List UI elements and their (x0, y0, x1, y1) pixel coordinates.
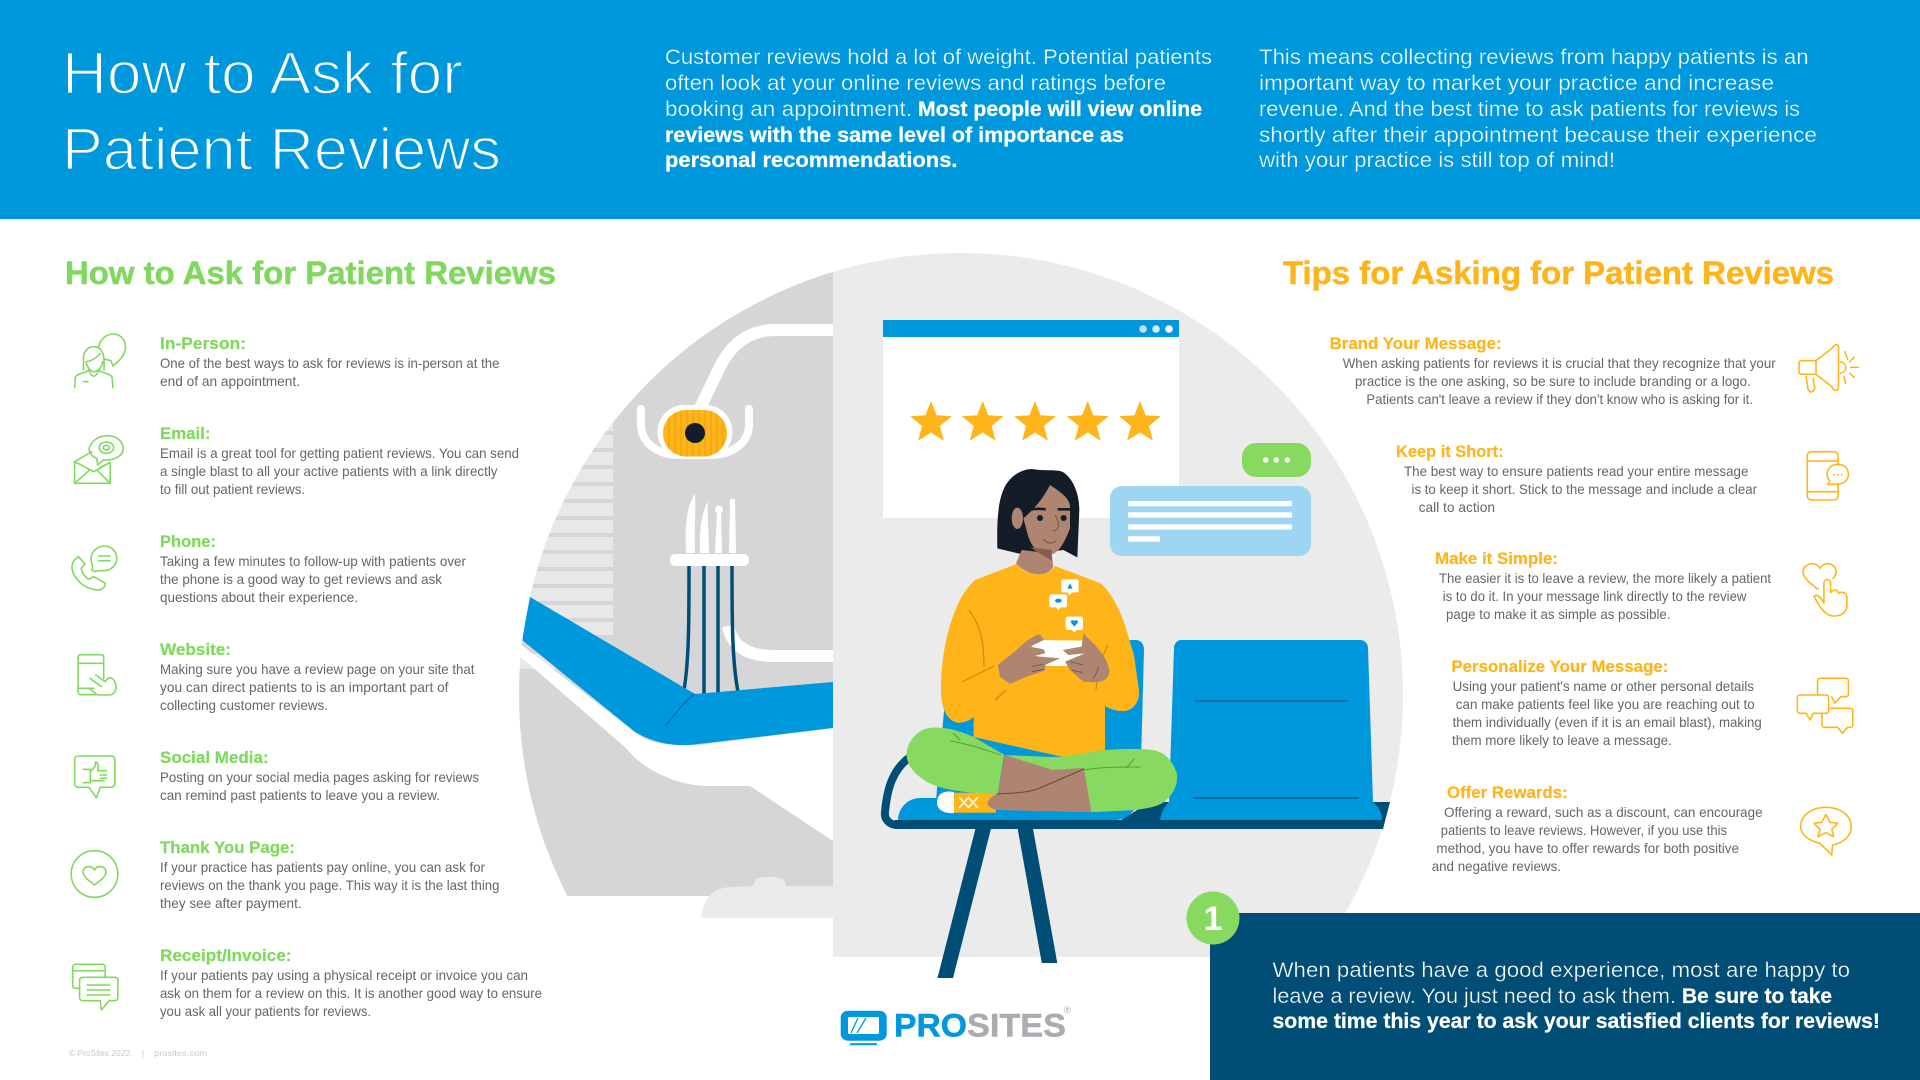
tip: keep it short: call to action (1419, 500, 1495, 515)
item: thank you page (160, 838, 499, 911)
panel: tips (1283, 255, 1858, 874)
item: website: you can direct patients to is an important part of (160, 680, 449, 695)
tip: make it simple: is to do it. In your message link directly to the review (1443, 589, 1747, 604)
item: receipt/invoice (160, 946, 542, 1019)
icon: phone message (1807, 452, 1848, 500)
sock and shoe (937, 792, 996, 813)
tip: offer rewards: and negative reviews. (1432, 859, 1561, 874)
section heading: Tips for Asking for Patient Reviews (1283, 255, 1834, 291)
dental chair blue cushion (522, 597, 833, 745)
intro text column 1: often look at your online reviews and ratings before (665, 72, 1166, 95)
callout: closing message (1210, 913, 1920, 1080)
logo: PRO (894, 1008, 967, 1044)
footer credit (69, 1049, 207, 1058)
logo icon (841, 1011, 887, 1045)
intro text column 1: Most people will view online (918, 98, 1202, 121)
item: receipt/invoice: Receipt/Invoice: (160, 946, 292, 965)
green typing bubble (1242, 443, 1311, 477)
tip: brand your message (1330, 334, 1776, 407)
tip: offer rewards: Offer Rewards: (1447, 783, 1568, 802)
item: website (160, 640, 475, 713)
title: Patient Reviews (62, 116, 501, 182)
icon: email (75, 436, 123, 483)
intro text column 1: reviews with the same level of importance as (665, 124, 1124, 147)
tip: personalize your message: can make patients feel like you are reaching out to (1456, 697, 1755, 712)
item: social media: can remind past patients to leave you a review. (160, 788, 440, 803)
intro text column 2 (1258, 46, 1817, 172)
item: in-person: end of an appointment. (160, 374, 300, 389)
item: phone: the phone is a good way to get reviews and ask (160, 572, 442, 587)
icon: megaphone (1799, 345, 1858, 392)
intro text column 1: Customer reviews hold a lot of weight. Potential patients (665, 46, 1212, 69)
item: thank you page: reviews on the thank you page. This way it is the last thing (160, 878, 499, 893)
review window (883, 320, 1179, 518)
item: thank you page: they see after payment. (160, 896, 302, 911)
left seat (936, 640, 1144, 800)
item: email: to fill out patient reviews. (160, 482, 305, 497)
tip: keep it short: is to keep it short. Stick to the message and include a clear (1412, 482, 1757, 497)
item: email: a single blast to all your active patients with a link directly (160, 464, 498, 479)
tip: brand your message: Brand Your Message: (1330, 334, 1502, 353)
item: phone: Taking a few minutes to follow-up with patients over (160, 554, 466, 569)
seated woman (906, 469, 1177, 813)
tip: offer rewards: method, you have to offer rewards for both positive (1436, 841, 1739, 856)
number badge: 1 (1204, 900, 1222, 938)
tip: personalize your message: Personalize Your Message: (1451, 657, 1668, 676)
tip: make it simple: Make it Simple: (1435, 549, 1558, 568)
tip: personalize your message (1451, 657, 1762, 748)
footer credit: © ProSites 2022 (69, 1049, 131, 1058)
crossed legs (906, 728, 1177, 812)
tip: offer rewards: Offering a reward, such as a discount, can encourage (1444, 805, 1763, 820)
icon: star bubble (1801, 807, 1851, 855)
waiting room bench (885, 640, 1390, 978)
tip: brand your message: Patients can't leave a review if they don't know who is asking for it. (1366, 392, 1753, 407)
panel: how to ask (65, 255, 556, 1058)
item: receipt/invoice: ask on them for a review on this. It is another good way to ensure (160, 986, 542, 1001)
tip: keep it short: Keep it Short: (1396, 442, 1504, 461)
tip: keep it short: The best way to ensure patients read your entire message (1404, 464, 1748, 479)
blue message card (1110, 486, 1311, 556)
dental office background (500, 240, 1433, 957)
icon: heart circle (71, 851, 118, 897)
tip: brand your message: practice is the one asking, so be sure to include branding or a logo. (1355, 374, 1751, 389)
icon: person speaking (75, 334, 126, 388)
item: thank you page: If your practice has patients pay online, you can ask for (160, 860, 485, 875)
logo: ® (1064, 1005, 1071, 1015)
item: thank you page: Thank You Page: (160, 838, 295, 857)
tip: personalize your message: them individually (even if it is an email blast), making (1453, 715, 1762, 730)
item: in-person: In-Person: (160, 334, 246, 353)
floating notifications (1049, 579, 1083, 633)
closing text: some time this year to ask your satisfied clients for reviews! (1272, 1010, 1880, 1033)
intro text column 1: personal recommendations. (665, 149, 958, 172)
icon: phone call (72, 546, 117, 590)
section heading: How to Ask for Patient Reviews (65, 255, 556, 291)
icon: heart tap (1803, 564, 1847, 616)
title (62, 40, 501, 182)
item: website: Making sure you have a review page on your site that (160, 662, 475, 677)
intro text column 1 (665, 46, 1212, 172)
footer credit: prosites.com (154, 1049, 207, 1058)
intro text column 1: booking an appointment. (665, 98, 912, 121)
title: How to Ask for (62, 40, 463, 106)
item: phone: Phone: (160, 532, 216, 551)
item: social media: Social Media: (160, 748, 269, 767)
tip: make it simple: page to make it as simple as possible. (1446, 607, 1670, 622)
logo (841, 1005, 1071, 1045)
header band (0, 0, 1920, 219)
number badge (1186, 892, 1240, 944)
item: email: Email: (160, 424, 210, 443)
item: in-person (160, 334, 500, 389)
item: social media (160, 748, 479, 803)
closing text (1272, 959, 1880, 1033)
tip: keep it short (1396, 442, 1757, 515)
phone and hands (998, 579, 1109, 684)
intro text column 2: important way to market your practice and increase (1259, 72, 1774, 95)
logo: SITES (967, 1008, 1066, 1044)
stool base (701, 877, 833, 918)
central illustration (500, 240, 1433, 978)
item: phone (160, 532, 466, 605)
icon: chat bubbles (1797, 678, 1853, 733)
yellow sweater (941, 564, 1139, 757)
tip: offer rewards: patients to leave reviews. However, if you use this (1441, 823, 1727, 838)
tip: personalize your message: Using your patient's name or other personal details (1453, 679, 1754, 694)
intro text column 2: with your practice is still top of mind! (1258, 149, 1615, 172)
closing text: leave a review. You just need to ask them. (1272, 985, 1676, 1008)
tip: offer rewards (1432, 783, 1763, 874)
item: email: Email is a great tool for getting patient reviews. You can send (160, 446, 519, 461)
footer credit: | (142, 1049, 144, 1058)
intro text column 2: This means collecting reviews from happy patients is an (1259, 46, 1809, 69)
lower pipe (728, 626, 833, 656)
tip: personalize your message: them more likely to leave a message. (1452, 733, 1672, 748)
intro text column 2: revenue. And the best time to ask patients for reviews is (1259, 98, 1800, 121)
item: phone: questions about their experience. (160, 590, 358, 605)
icon: thumbs up (75, 756, 115, 798)
tip: make it simple: The easier it is to leave a review, the more likely a patient (1439, 571, 1771, 586)
item: email (160, 424, 519, 497)
right seat (1160, 640, 1382, 820)
dental chair white frame (515, 640, 833, 841)
tip: make it simple (1435, 549, 1771, 622)
item: social media: Posting on your social media pages asking for reviews (160, 770, 479, 785)
item: website: collecting customer reviews. (160, 698, 328, 713)
item: receipt/invoice: you ask all your patients for reviews. (160, 1004, 371, 1019)
item: in-person: One of the best ways to ask for reviews is in-person at the (160, 356, 500, 371)
dental tools and tray (670, 494, 749, 694)
item: receipt/invoice: If your patients pay using a physical receipt or invoice you can (160, 968, 528, 983)
dental lamp (641, 405, 749, 459)
hair and face (997, 469, 1079, 574)
closing text: Be sure to take (1682, 985, 1832, 1008)
tip: brand your message: When asking patients for reviews it is crucial that they recognize that your (1343, 356, 1776, 371)
five stars (910, 401, 1161, 441)
icon: receipt messages (73, 964, 118, 1010)
closing text: When patients have a good experience, most are happy to (1272, 959, 1850, 982)
item: website: Website: (160, 640, 231, 659)
icon: website tap (78, 655, 116, 695)
intro text column 2: shortly after their appointment because their experience (1259, 124, 1817, 147)
dental lamp arm (700, 330, 833, 408)
